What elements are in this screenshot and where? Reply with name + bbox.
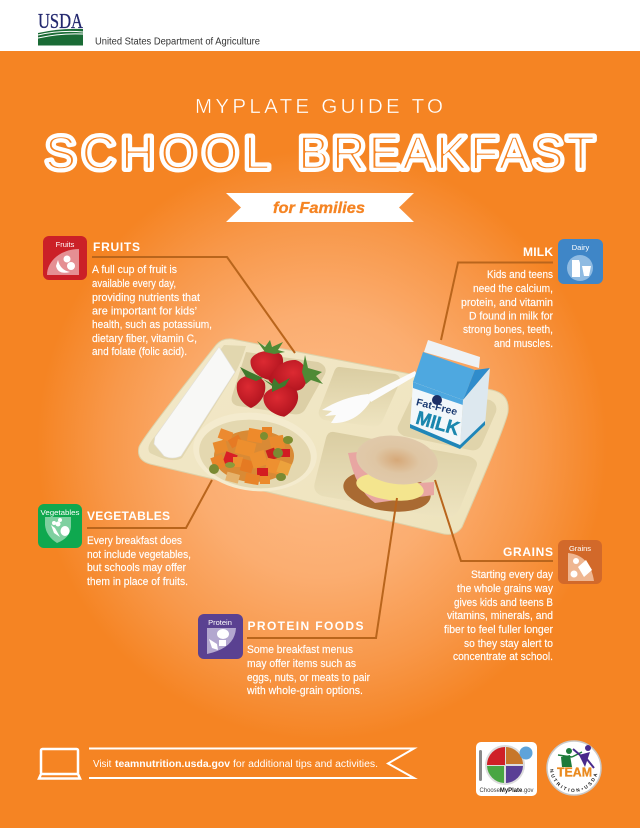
title: SCHOOL <box>45 126 270 179</box>
text: grains <box>444 569 553 663</box>
text: fruits: A full cup of fruit is <box>92 264 177 276</box>
text: vegetables <box>87 535 191 588</box>
title <box>45 126 595 179</box>
panel: milk <box>461 239 603 350</box>
text: protein foods <box>246 644 370 697</box>
website ribbon: for additional tips and activities. <box>233 759 378 770</box>
icon: laptop <box>39 749 80 778</box>
panel: protein foods <box>198 614 370 697</box>
plastic fork <box>322 371 417 423</box>
heading: grains: GRAINS <box>503 545 553 559</box>
text: fruits: dietary fiber, vitamin C, <box>92 333 197 345</box>
text: milk: strong bones, teeth, <box>463 324 553 336</box>
title: BREAKFAST <box>298 126 595 179</box>
text: milk: protein, and vitamin <box>461 297 553 309</box>
strawberries <box>237 340 323 420</box>
text: protein foods: with whole-grain options. <box>246 685 363 697</box>
napkin well <box>148 345 246 460</box>
text: fruits: available every day, <box>92 278 176 290</box>
heading: milk: MILK <box>523 245 553 259</box>
leader line: milk <box>441 262 553 340</box>
milk well <box>398 384 496 450</box>
website ribbon: Visit <box>93 759 112 770</box>
leader line: protein <box>247 498 397 638</box>
subtitle: MYPLATE GUIDE TO <box>195 95 443 118</box>
heading: vegetables: VEGETABLES <box>87 509 170 523</box>
fork well <box>319 367 400 426</box>
icon: grains: Grains <box>569 544 591 553</box>
USDA logo <box>38 9 84 46</box>
carton label: Fat-Free <box>415 397 459 418</box>
text: fruits: and folate (folic acid). <box>92 346 187 358</box>
text: fruits: providing nutrients that <box>92 292 201 304</box>
USDA logo: USDA <box>38 9 84 33</box>
department name: United States Department of Agriculture <box>95 36 260 48</box>
title: BREAKFAST <box>298 126 595 179</box>
heading: fruits: FRUITS <box>93 240 140 254</box>
text: vegetables: not include vegetables, <box>87 549 191 561</box>
text: milk: need the calcium, <box>473 283 553 295</box>
fruit well <box>232 352 326 414</box>
text: grains: the whole grains way <box>457 583 553 595</box>
napkin <box>154 347 235 458</box>
icon: fruits: Fruits <box>56 240 75 249</box>
breakfast sandwich <box>341 431 441 517</box>
for families banner <box>226 193 414 222</box>
title: SCHOOL <box>45 126 270 179</box>
text: protein foods: eggs, nuts, or meats to pair <box>247 672 370 684</box>
text: milk: Kids and teens <box>487 269 553 281</box>
sandwich well <box>314 432 477 518</box>
icon: vegetables: Vegetables <box>40 508 80 517</box>
text: fruits <box>92 264 212 358</box>
tray body <box>138 339 508 534</box>
text: protein foods: Some breakfast menus <box>247 644 353 656</box>
icon: vegetables <box>38 504 82 548</box>
logo: ChooseMyPlate: ChooseMyPlate.gov <box>480 787 534 794</box>
carton label: MILK <box>413 408 462 440</box>
round bowl well <box>189 407 321 497</box>
text: grains: concentrate at school. <box>453 651 553 663</box>
icon: protein: Protein <box>208 618 232 627</box>
panel: fruits <box>43 236 212 358</box>
icon: protein <box>198 614 243 659</box>
header: white USDA band <box>0 0 640 52</box>
icon: dairy: Dairy <box>572 243 589 252</box>
logo: Team Nutrition: NUTRITION•USDA <box>550 769 598 792</box>
text: grains: Starting every day <box>471 569 553 581</box>
text: fruits: health, such as potassium, <box>92 319 212 331</box>
heading: protein foods: PROTEIN FOODS <box>248 619 364 633</box>
text: protein foods: may offer items such as <box>247 658 356 670</box>
website ribbon <box>89 748 414 778</box>
panel: grains <box>444 540 602 663</box>
website ribbon: teamnutrition.usda.gov <box>115 759 231 770</box>
logo: Team Nutrition: TEAM <box>557 766 592 780</box>
lunch tray with food <box>138 339 508 534</box>
leader line: grains <box>435 480 553 561</box>
text: vegetables: but schools may offer <box>87 562 186 574</box>
text: grains: gives kids and teens B <box>454 597 553 609</box>
text: grains: vitamins, minerals, and <box>447 610 553 622</box>
vegetable mix <box>209 427 294 485</box>
leader line: vegetables <box>87 480 212 528</box>
text: vegetables: Every breakfast does <box>87 535 182 547</box>
icon: dairy <box>558 239 603 284</box>
text: milk: D found in milk for <box>469 310 553 322</box>
leader line: fruits <box>92 257 295 353</box>
text: milk: and muscles. <box>494 338 553 350</box>
text: milk <box>461 269 553 350</box>
logo: Team Nutrition <box>546 740 602 796</box>
text: fruits: are important for kids’ <box>92 306 197 318</box>
text: grains: so they stay alert to <box>464 638 553 650</box>
for families banner: for Families <box>273 200 365 217</box>
icon: fruits <box>43 236 87 280</box>
text: vegetables: them in place of fruits. <box>87 576 188 588</box>
icon: grains <box>558 540 602 584</box>
logo: ChooseMyPlate <box>476 742 537 796</box>
text: grains: fiber to feel fuller longer <box>444 624 553 636</box>
panel: vegetables <box>38 504 191 588</box>
milk carton <box>410 340 490 449</box>
